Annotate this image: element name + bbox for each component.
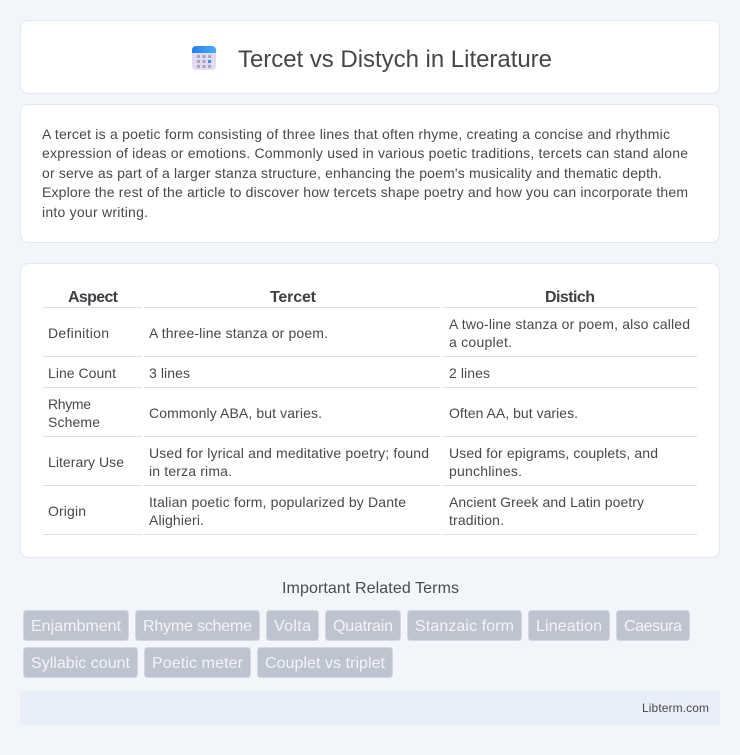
row: line count: 3 lines bbox=[149, 365, 190, 381]
row: literary use bbox=[48, 445, 658, 479]
row: origin: Origin bbox=[48, 503, 86, 519]
row: literary use: Used for lyrical and meditative poetry; found bbox=[149, 445, 429, 461]
related terms tags: Quatrain bbox=[333, 618, 393, 635]
related terms tags: Volta bbox=[274, 618, 311, 635]
row: origin: Ancient Greek and Latin poetry bbox=[449, 494, 644, 510]
row: origin bbox=[48, 494, 644, 528]
row: origin: tradition. bbox=[449, 512, 504, 528]
row: line count: Line Count bbox=[48, 365, 116, 381]
row: definition: A two-line stanza or poem, also called bbox=[449, 316, 690, 332]
table header: Tercet bbox=[270, 289, 317, 306]
related terms tags: Syllabic count bbox=[31, 655, 131, 672]
row: line count: 2 lines bbox=[449, 365, 490, 381]
table header: Aspect bbox=[68, 289, 119, 306]
related terms tags: Couplet vs triplet bbox=[265, 655, 386, 672]
related terms heading: Important Related Terms bbox=[282, 580, 459, 597]
table panel bbox=[20, 264, 720, 558]
row: rhyme scheme: Often AA, but varies. bbox=[449, 405, 578, 421]
row: literary use: punchlines. bbox=[449, 463, 522, 479]
row: rhyme scheme bbox=[48, 396, 578, 430]
intro text bbox=[42, 126, 688, 220]
related terms tags: Stanzaic form bbox=[415, 618, 514, 635]
related terms tags: Poetic meter bbox=[152, 655, 244, 672]
row: origin: Alighieri. bbox=[149, 512, 204, 528]
related terms tags: Enjambment bbox=[31, 618, 122, 635]
intro text: A tercet is a poetic form consisting of three lines that often rhyme, creating a concise and rhythmic bbox=[42, 126, 670, 142]
intro text: or serve as part of a larger stanza structure, enhancing the poem's musicality and thematic depth. bbox=[42, 165, 662, 181]
row: line count bbox=[48, 365, 490, 381]
comparison table bbox=[43, 289, 697, 535]
related terms tags: Lineation bbox=[536, 618, 602, 635]
footer bar bbox=[20, 691, 720, 725]
related terms tags: Rhyme scheme bbox=[143, 618, 252, 635]
row: rhyme scheme: Rhyme bbox=[48, 396, 91, 412]
icon: calendar bbox=[192, 46, 216, 70]
intro text: Explore the rest of the article to discover how tercets shape poetry and how you can incorporate them bbox=[42, 184, 688, 200]
table header bbox=[68, 289, 595, 306]
row: definition: a couplet. bbox=[449, 334, 512, 350]
row: definition: Definition bbox=[48, 325, 109, 341]
header panel bbox=[20, 20, 720, 94]
intro panel bbox=[20, 104, 720, 242]
row: literary use: Literary Use bbox=[48, 454, 124, 470]
row: definition: A three-line stanza or poem. bbox=[149, 325, 328, 341]
row: literary use: in terza rima. bbox=[149, 463, 232, 479]
title: Tercet vs Distych in Literature bbox=[238, 46, 552, 73]
intro text: expression of ideas or emotions. Commonly used in various poetic traditions, tercets can stand alone bbox=[42, 145, 688, 161]
row: literary use: Used for epigrams, couplets, and bbox=[449, 445, 658, 461]
intro text: into your writing. bbox=[42, 204, 148, 220]
related terms tags: Caesura bbox=[624, 618, 682, 635]
footer credit: Libterm.com bbox=[642, 701, 709, 715]
row: rhyme scheme: Scheme bbox=[48, 414, 100, 430]
related terms tags bbox=[24, 610, 690, 678]
table header: Distich bbox=[545, 289, 595, 306]
row: rhyme scheme: Commonly ABA, but varies. bbox=[149, 405, 322, 421]
row: definition bbox=[48, 316, 690, 350]
row: origin: Italian poetic form, popularized by Dante bbox=[149, 494, 406, 510]
